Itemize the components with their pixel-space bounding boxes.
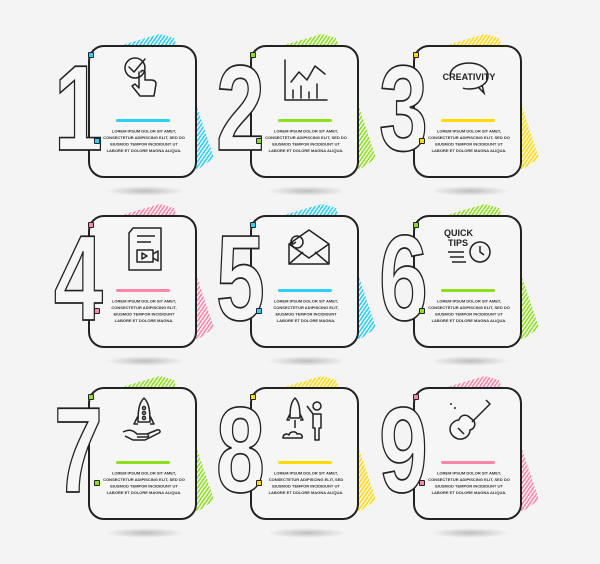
panel box 3 bbox=[413, 45, 522, 178]
digit 6: 6 bbox=[379, 210, 428, 346]
icon: electric guitar bbox=[449, 400, 491, 440]
card 2 bbox=[216, 34, 376, 195]
panel box 4 bbox=[88, 215, 197, 348]
card 8 bbox=[216, 376, 376, 537]
icon: rocket in hand bbox=[122, 397, 161, 441]
text 9: LOREM IPSUM DOLOR SIT AMET, bbox=[437, 471, 501, 476]
text 4: EIUSMOD TEMPOR INCIDIDUNT bbox=[113, 312, 175, 316]
text 3: CONSECTETUR ADIPISCING ELIT, SED DO bbox=[428, 136, 510, 140]
text 7: LOREM IPSUM DOLOR SIT AMET, bbox=[112, 471, 176, 476]
icon: rocket launch + person bbox=[282, 397, 322, 441]
card 7 bbox=[54, 376, 214, 537]
panel box 2 bbox=[250, 45, 359, 178]
digit 3: 3 bbox=[379, 40, 428, 176]
text 2 bbox=[265, 129, 347, 153]
card 4 bbox=[54, 204, 214, 365]
icon: creativity bubble bbox=[443, 62, 496, 96]
text 9 bbox=[428, 471, 510, 495]
text 8 bbox=[268, 471, 344, 495]
text 8: EIUSMOD TEMPOR INCIDIDUNT UT bbox=[272, 484, 340, 488]
text 3: EIUSMOD TEMPOR INCIDIDUNT UT bbox=[435, 142, 503, 146]
text 7: EIUSMOD TEMPOR INCIDIDUNT UT bbox=[110, 484, 178, 488]
icon: quick tips bbox=[444, 228, 491, 263]
text 4: LABORE ET DOLORE MAGNA. bbox=[115, 318, 173, 323]
text 2: LOREM IPSUM DOLOR SIT AMET, bbox=[274, 129, 338, 134]
digit 5: 5 bbox=[216, 210, 265, 346]
icon: touch check bbox=[124, 57, 157, 97]
panel box 5 bbox=[250, 215, 359, 348]
text 4: CONSECTETUR ADIPISCING ELIT, bbox=[111, 306, 177, 310]
text 1: EIUSMOD TEMPOR INCIDIDUNT UT bbox=[110, 142, 178, 146]
icon: open mail bbox=[288, 229, 330, 265]
text 7: LABORE ET DOLORE MAGNA ALIQUA. bbox=[107, 490, 181, 495]
text 8: LABORE ET DOLORE MAGNA ALIQUA. bbox=[269, 490, 343, 495]
icon: video file bbox=[128, 227, 162, 271]
text 2: EIUSMOD TEMPOR INCIDIDUNT UT bbox=[272, 142, 340, 146]
digit 8: 8 bbox=[216, 382, 265, 518]
panel box 7 bbox=[88, 387, 197, 520]
text 6: CONSECTETUR ADIPISCING ELIT, SED DO bbox=[428, 306, 510, 310]
card 3 bbox=[379, 34, 539, 195]
text 2: CONSECTETUR ADIPISCING ELIT, SED DO bbox=[265, 136, 347, 140]
text 3: LOREM IPSUM DOLOR SIT AMET, bbox=[437, 129, 501, 134]
panel box 1 bbox=[88, 45, 197, 178]
icon: quick tips: TIPS bbox=[448, 238, 468, 248]
text 5: EIUSMOD TEMPOR INCIDIDUNT bbox=[275, 312, 337, 316]
text 7 bbox=[103, 471, 185, 495]
text 8: LOREM IPSUM DOLOR SIT AMET, bbox=[274, 471, 338, 476]
text 5 bbox=[273, 299, 339, 323]
digit 4: 4 bbox=[54, 210, 103, 346]
text 9: EIUSMOD TEMPOR INCIDIDUNT UT bbox=[435, 484, 503, 488]
text 6: LABORE ET DOLORE MAGNA ALIQUA. bbox=[432, 318, 506, 323]
card 9 bbox=[379, 376, 539, 537]
digit 1: 1 bbox=[54, 40, 103, 176]
card 6 bbox=[379, 204, 539, 365]
text 4: LOREM IPSUM DOLOR SIT AMET, bbox=[112, 299, 176, 304]
digit 7: 7 bbox=[54, 382, 103, 518]
text 2: LABORE ET DOLORE MAGNA ALIQUA. bbox=[269, 148, 343, 153]
text 6 bbox=[428, 299, 510, 323]
digit 9: 9 bbox=[379, 382, 428, 518]
text 3 bbox=[428, 129, 510, 153]
text 5: LABORE ET DOLORE MAGNA. bbox=[277, 318, 335, 323]
text 6: LOREM IPSUM DOLOR SIT AMET, bbox=[437, 299, 501, 304]
text 1: CONSECTETUR ADIPISCING ELIT, SED DO bbox=[103, 136, 185, 140]
text 9: LABORE ET DOLORE MAGNA ALIQUA. bbox=[432, 490, 506, 495]
digit 2: 2 bbox=[216, 40, 265, 176]
text 7: CONSECTETUR ADIPISCING ELIT, SED DO bbox=[103, 478, 185, 482]
text 1 bbox=[103, 129, 185, 153]
panel box 9 bbox=[413, 387, 522, 520]
card 5 bbox=[216, 204, 376, 365]
text 1: LABORE ET DOLORE MAGNA ALIQUA. bbox=[107, 148, 181, 153]
text 3: LABORE ET DOLORE MAGNA ALIQUA. bbox=[432, 148, 506, 153]
text 5: LOREM IPSUM DOLOR SIT AMET, bbox=[274, 299, 338, 304]
text 5: CONSECTETUR ADIPISCING ELIT, bbox=[273, 306, 339, 310]
icon: chart bbox=[284, 59, 328, 101]
text 4 bbox=[111, 299, 177, 323]
card 1 bbox=[54, 34, 214, 195]
panel box 8 bbox=[250, 387, 359, 520]
text 8: CONSECTETUR ADIPISCING ELIT, SED bbox=[269, 478, 343, 482]
icon: quick tips: QUICK bbox=[444, 228, 474, 238]
panel box 6 bbox=[413, 215, 522, 348]
icon: creativity bubble: CREATIVITY bbox=[443, 72, 495, 82]
text 9: CONSECTETUR ADIPISCING ELIT, SED DO bbox=[428, 478, 510, 482]
text 1: LOREM IPSUM DOLOR SIT AMET, bbox=[112, 129, 176, 134]
text 6: EIUSMOD TEMPOR INCIDIDUNT UT bbox=[435, 312, 503, 316]
